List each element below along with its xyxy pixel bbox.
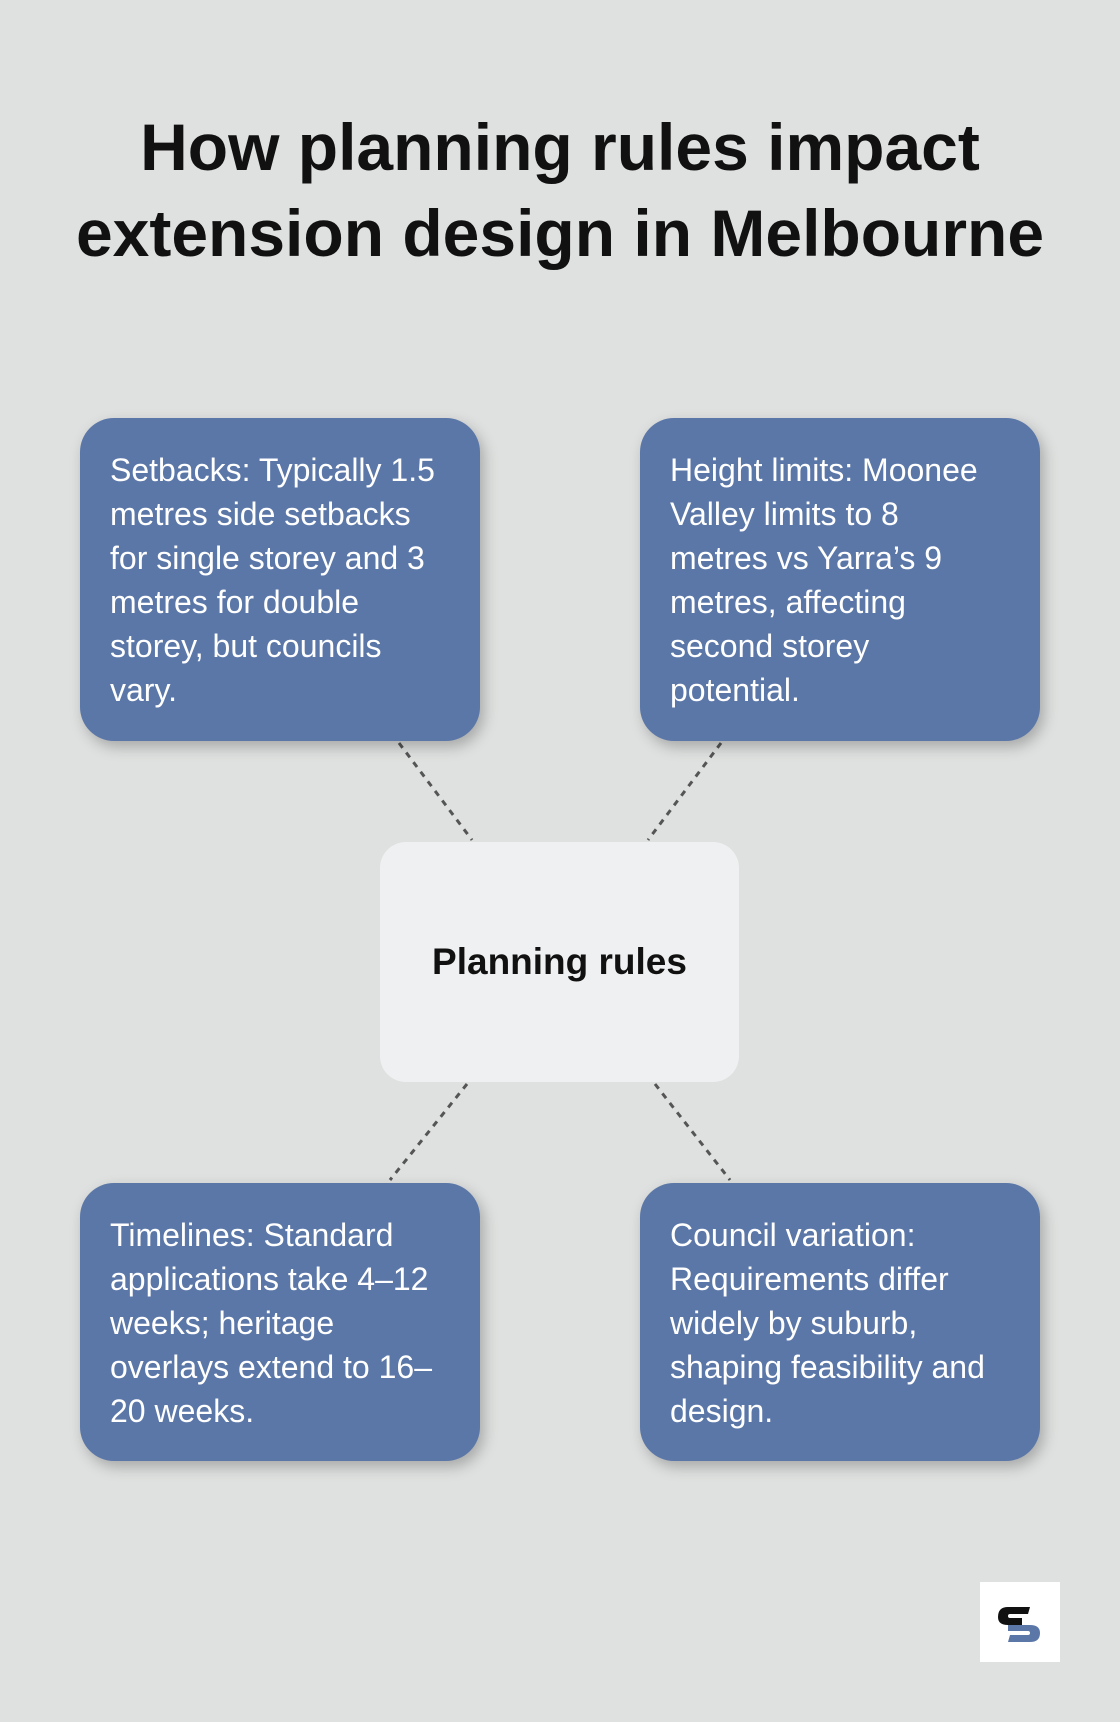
center node: Planning rules	[432, 941, 687, 982]
panel: timelines: applications take 4–12	[110, 1261, 428, 1297]
panel: height limits: metres, affecting	[670, 584, 906, 620]
panel: council variation: Requirements differ	[670, 1261, 949, 1297]
title: extension design in Melbourne	[76, 196, 1044, 270]
panel: timelines: Timelines: Standard	[110, 1217, 393, 1253]
center node	[380, 842, 739, 1082]
panel: setbacks: Setbacks: Typically 1.5	[110, 452, 435, 488]
panel: setbacks: for single storey and 3	[110, 540, 425, 576]
panel: setbacks: storey, but councils	[110, 628, 382, 664]
panel: height limits: Height limits: Moonee	[670, 452, 978, 488]
panel: height limits: potential.	[670, 672, 800, 708]
panel: timelines	[80, 1183, 480, 1461]
panel: height limits: metres vs Yarra’s 9	[670, 540, 942, 576]
logo	[980, 1582, 1060, 1662]
panel: setbacks: vary.	[110, 672, 177, 708]
panel: height limits: second storey	[670, 628, 869, 664]
panel: height limits	[640, 418, 1040, 741]
panel: council variation: widely by suburb,	[670, 1305, 917, 1341]
panel: timelines: 20 weeks.	[110, 1393, 254, 1429]
panel: timelines: weeks; heritage	[110, 1305, 334, 1341]
panel: council variation	[640, 1183, 1040, 1461]
panel: setbacks: metres for double	[110, 584, 359, 620]
panel: timelines: overlays extend to 16–	[110, 1349, 432, 1385]
panel: setbacks: metres side setbacks	[110, 496, 411, 532]
panel: setbacks	[80, 418, 480, 741]
title	[76, 110, 1044, 270]
panel: height limits: Valley limits to 8	[670, 496, 899, 532]
panel: council variation: Council variation:	[670, 1217, 915, 1253]
panel: council variation: design.	[670, 1393, 773, 1429]
panel: council variation: shaping feasibility and	[670, 1349, 985, 1385]
title: How planning rules impact	[140, 110, 980, 184]
